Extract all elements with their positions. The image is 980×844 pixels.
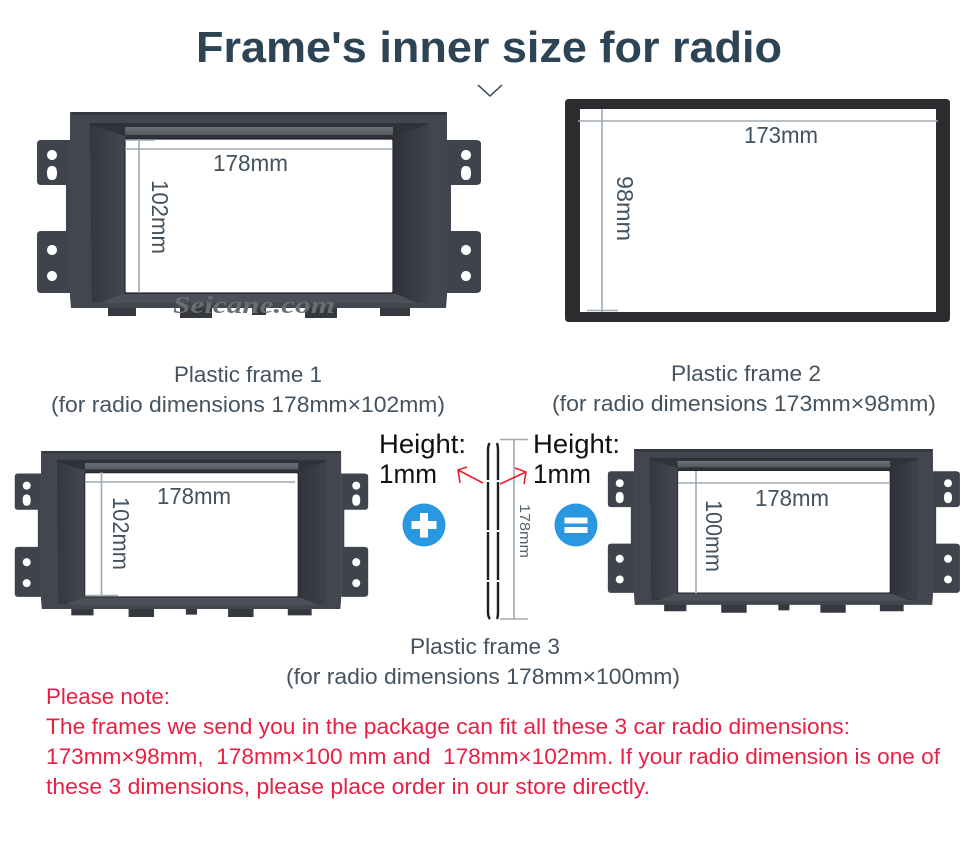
caption: frame 1: (for radio dimensions 178mm×102mm): [51, 392, 445, 417]
trim strips: [488, 443, 498, 619]
bevel right: [393, 125, 428, 302]
frame 1 photo: [37, 112, 481, 319]
note text: 173mm×98mm, 178mm×100 mm and 178mm×102mm. If your radio dimension is one of: [46, 744, 941, 769]
panel: plastic frame 1: [37, 112, 481, 319]
bevel bottom: [100, 294, 418, 303]
panel: frame 3 result: [608, 449, 960, 613]
label: height right: Height:: [533, 429, 620, 459]
title: Frame's inner size for radio: [196, 23, 782, 72]
watermark: Seicane.com: [173, 293, 335, 319]
caption: frame 1: Plastic frame 1: [174, 362, 322, 387]
bevel left: [90, 125, 125, 302]
bevel recess: [90, 123, 428, 302]
height label: 102mm: [147, 180, 173, 254]
dimension lines: [678, 471, 889, 594]
panel: frame 3 base: [15, 451, 368, 617]
inner opening: [125, 139, 393, 293]
bottom tabs: [108, 306, 410, 318]
bevel top band: [125, 127, 393, 135]
top shadow: [72, 112, 446, 115]
caption: frame 3: Plastic frame 3: [410, 634, 560, 659]
caption: frame 3: (for radio dimensions 178mm×100mm): [286, 664, 680, 689]
width label: 173mm: [744, 122, 818, 148]
caption: frame 2: Plastic frame 2: [671, 361, 821, 386]
caption: frame 3: [286, 634, 680, 689]
icon: plus: [402, 504, 446, 546]
arrow: left red: [458, 467, 483, 483]
label: height right: [533, 429, 620, 489]
label: height left: 1mm: [379, 459, 437, 489]
height label: 100mm: [701, 500, 727, 572]
width label: 178mm: [157, 483, 231, 509]
caption: frame 1: [51, 362, 445, 417]
frame 2 border: [565, 99, 950, 322]
frame photo: [608, 449, 960, 613]
mounting ears: [37, 140, 70, 293]
panel: plastic frame 2: [565, 99, 950, 322]
caption: frame 2: (for radio dimensions 173mm×98mm): [552, 391, 936, 416]
arrow: right red: [500, 468, 526, 484]
width label: 178mm: [213, 150, 288, 176]
dimension: strip length: [500, 440, 533, 619]
frame body: [70, 112, 447, 308]
caption: frame 2: [552, 361, 936, 416]
dimension lines: [85, 472, 295, 596]
note text: The frames we send you in the package can fit all these 3 car radio dimensions:: [46, 714, 850, 739]
note text: [46, 684, 941, 799]
dimension: strip length: 178mm: [516, 504, 533, 558]
note text: Please note:: [46, 684, 170, 709]
note text: these 3 dimensions, please place order in our store directly.: [46, 774, 650, 799]
dimension lines: [578, 109, 938, 312]
frame photo: [15, 451, 368, 617]
icon: chevron down: [478, 85, 502, 96]
label: height right: 1mm: [533, 459, 591, 489]
height label: 102mm: [108, 497, 134, 570]
dimension lines: [125, 139, 392, 293]
width label: 178mm: [755, 485, 829, 511]
height label: 98mm: [612, 176, 638, 241]
label: height left: Height:: [379, 429, 466, 459]
label: height left: [379, 429, 466, 489]
icon: equals: [554, 504, 598, 546]
